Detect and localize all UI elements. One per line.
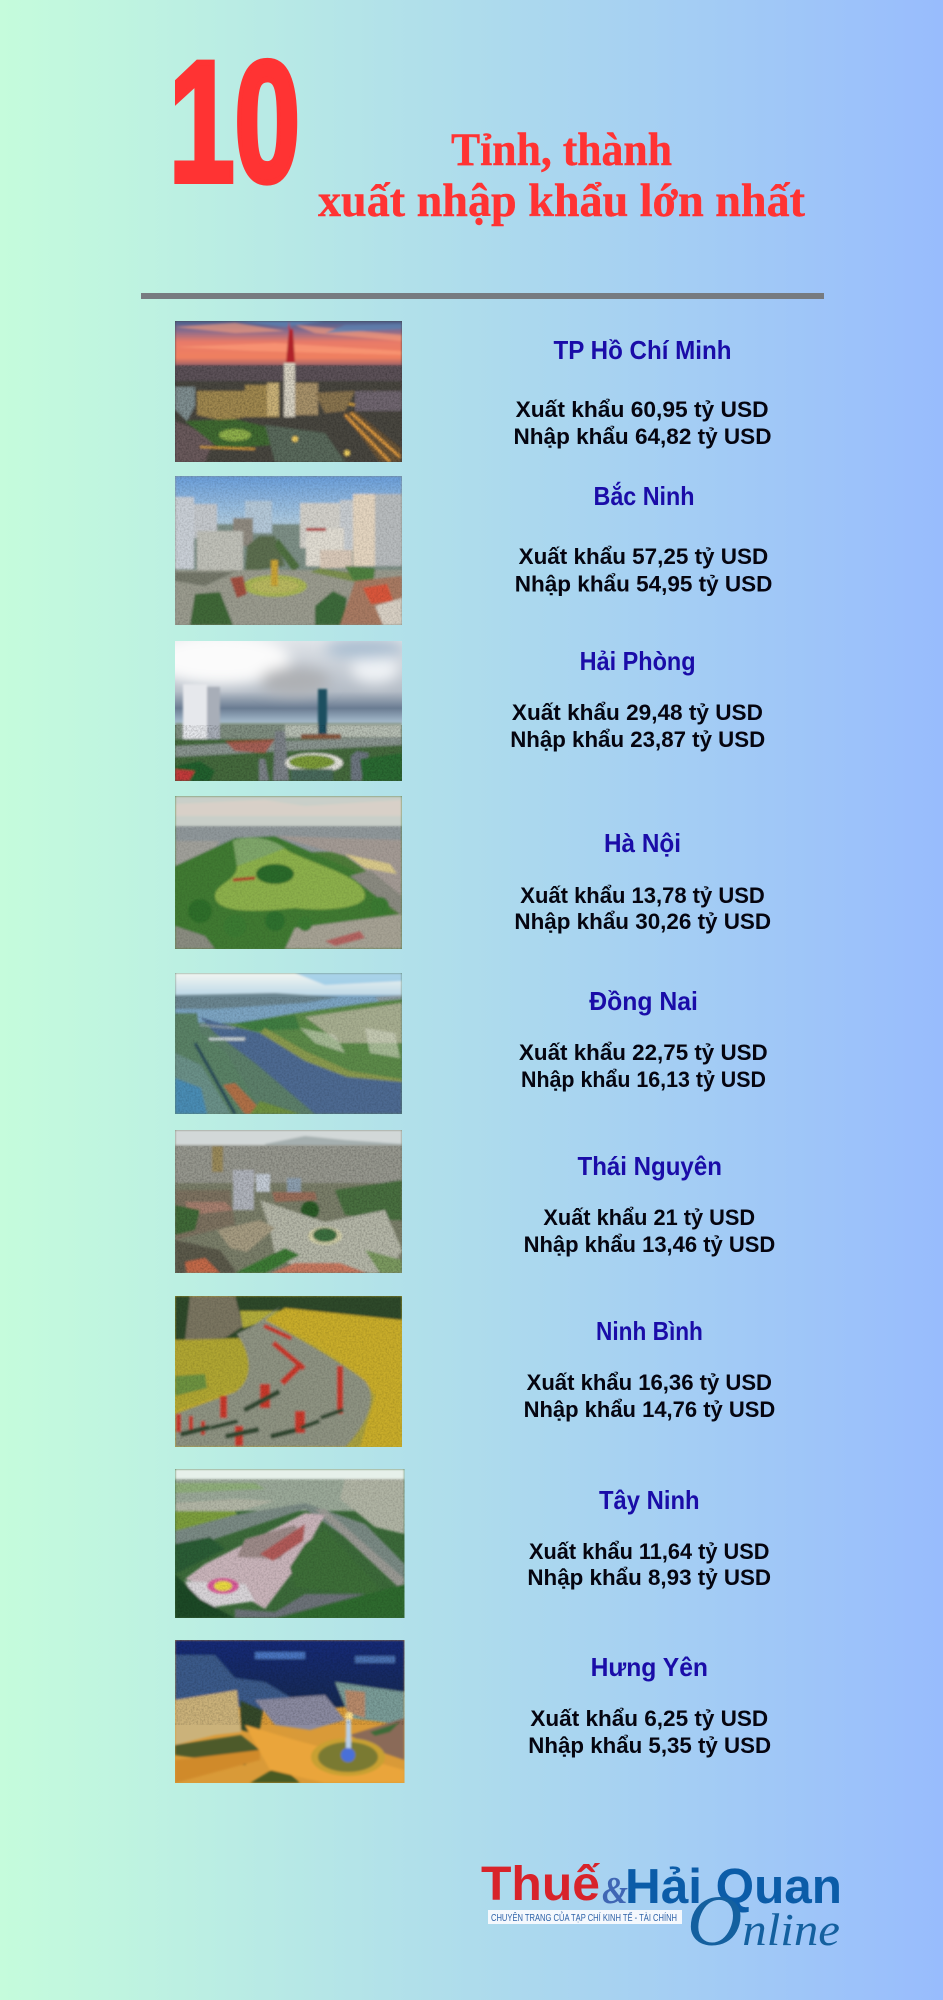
figures: TP Hồ Chí Minh: Xuất khẩu 60,95 tỷ USD [516,397,769,422]
label: TP Hồ Chí Minh: TP Hồ Chí Minh [554,335,732,365]
row: Tây Ninh [175,1469,771,1618]
label: Đồng Nai: Đồng Nai [589,986,698,1016]
row: Đồng Nai [175,973,768,1114]
label: Thái Nguyên: Thái Nguyên [578,1151,722,1181]
figures: Thái Nguyên [524,1205,775,1257]
title: Tỉnh, thành [451,124,672,176]
figures: Ninh Bình: Nhập khẩu 14,76 tỷ USD [524,1397,775,1422]
row: Hưng Yên [175,1640,771,1783]
figures: Hà Nội [514,883,771,934]
figures: TP Hồ Chí Minh [514,397,772,449]
logo: Thuế & Hải Quan Online: CHUYÊN TRANG CỦA TẠP CHÍ KINH TẾ - TÀI CHÍNH [491,1911,677,1924]
figures: Hưng Yên: Nhập khẩu 5,35 tỷ USD [528,1733,771,1758]
logo: Thuế & Hải Quan Online: Thuế [481,1858,600,1911]
row: Ninh Bình [175,1296,775,1447]
label: Tây Ninh: Tây Ninh [599,1485,700,1515]
figures: Tây Ninh [527,1539,771,1590]
figures: Ninh Bình: Xuất khẩu 16,36 tỷ USD [527,1370,772,1395]
photo: TP Hồ Chí Minh skyline at dusk [175,321,402,462]
figures: Hà Nội: Xuất khẩu 13,78 tỷ USD [520,883,765,908]
figures: Hải Phòng: Xuất khẩu 29,48 tỷ USD [512,700,763,725]
row: Hà Nội [175,796,771,949]
figures: Bắc Ninh: Nhập khẩu 54,95 tỷ USD [515,572,772,597]
photo: Hải Phòng towers and overpass [175,641,402,781]
big number 10: 10 [169,26,300,218]
photo: Bắc Ninh city roundabout [175,476,402,625]
figures: Thái Nguyên: Nhập khẩu 13,46 tỷ USD [524,1232,775,1257]
label: Hải Phòng: Hải Phòng [580,646,696,676]
logo: Thuế & Hải Quan Online: & [602,1870,628,1912]
figures: Đồng Nai: Xuất khẩu 22,75 tỷ USD [519,1040,768,1065]
label: Hà Nội: Hà Nội [604,828,681,858]
photo: Thái Nguyên city roundabout [175,1130,402,1273]
title [318,124,805,227]
row: Bắc Ninh [175,476,772,625]
figures: Tây Ninh: Nhập khẩu 8,93 tỷ USD [527,1565,771,1590]
figures: Bắc Ninh [515,544,772,597]
figures: Hưng Yên: Xuất khẩu 6,25 tỷ USD [530,1706,768,1731]
label: Ninh Bình: Ninh Bình [596,1316,703,1346]
photo: Tây Ninh memorial plaza [175,1469,404,1618]
figures: Hải Phòng: Nhập khẩu 23,87 tỷ USD [510,727,765,752]
row: Hải Phòng [150,633,765,781]
logo: Thuế & Hải Quan Online: Online [687,1881,840,1961]
figures: Đồng Nai [519,1040,768,1092]
title: xuất nhập khẩu lớn nhất [318,175,805,227]
photo: Đồng Nai river aerial [175,973,402,1114]
photo: Ninh Bình boat festival in rice fields [175,1296,402,1447]
figures: Hưng Yên [528,1706,771,1758]
figures: Thái Nguyên: Xuất khẩu 21 tỷ USD [543,1205,755,1230]
row: Thái Nguyên [175,1130,775,1273]
figures: Ninh Bình [524,1370,775,1422]
photo: Hưng Yên roundabout at night [175,1640,404,1783]
figures: Đồng Nai: Nhập khẩu 16,13 tỷ USD [521,1067,766,1092]
figures: TP Hồ Chí Minh: Nhập khẩu 64,82 tỷ USD [514,424,772,449]
photo: Hà Nội Hoàn Kiếm lake [175,796,402,949]
logo: Thuế & Hải Quan Online: Hải Quan [625,1860,842,1914]
logo: Thuế & Hải Quan Online [481,1858,842,1961]
figures: Tây Ninh: Xuất khẩu 11,64 tỷ USD [529,1539,769,1564]
figures: Hà Nội: Nhập khẩu 30,26 tỷ USD [514,909,771,934]
figures: Hải Phòng [510,700,765,752]
row: TP Hồ Chí Minh [175,321,772,462]
figures: Bắc Ninh: Xuất khẩu 57,25 tỷ USD [519,544,768,569]
label: Bắc Ninh: Bắc Ninh [594,481,694,511]
label: Hưng Yên: Hưng Yên [591,1652,708,1682]
